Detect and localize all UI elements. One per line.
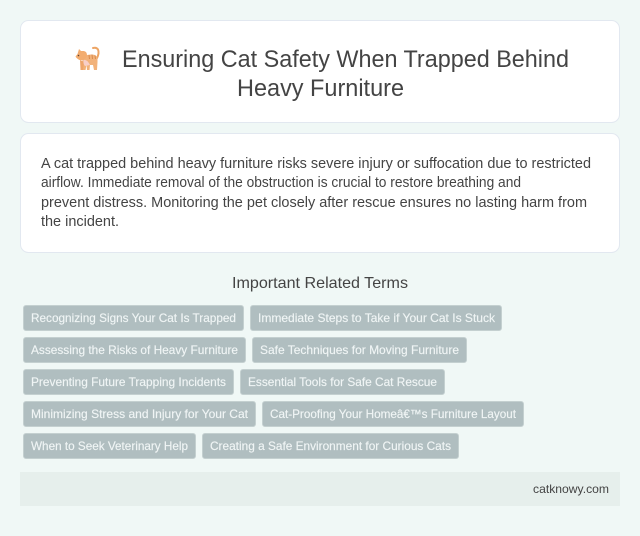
tag: Immediate Steps to Take if Your Cat Is Stuck: [258, 311, 496, 325]
tag: [24, 402, 256, 426]
tag: Safe Techniques for Moving Furniture: [260, 343, 459, 357]
intro paragraph: A cat trapped behind heavy furniture risks severe injury or suffocation due to restricted: [41, 156, 591, 172]
footer bar: catknowy.com: [533, 482, 609, 496]
tag: Creating a Safe Environment for Curious Cats: [210, 439, 451, 453]
intro paragraph: airflow. Immediate removal of the obstruction is crucial to restore breathing and: [41, 175, 521, 191]
tag: [24, 306, 244, 330]
title: Ensuring Cat Safety When Trapped Behind: [122, 46, 569, 73]
icon: cat: [76, 48, 99, 70]
intro paragraph: prevent distress. Monitoring the pet closely after rescue ensures no lasting harm from: [41, 195, 587, 211]
title: Heavy Furniture: [237, 75, 404, 102]
tag: Essential Tools for Safe Cat Rescue: [248, 375, 437, 389]
tag: Assessing the Risks of Heavy Furniture: [31, 343, 238, 357]
tag: Recognizing Signs Your Cat Is Trapped: [31, 311, 236, 325]
tag: [262, 402, 524, 426]
tag: [252, 338, 466, 362]
tag: [250, 306, 502, 330]
heading: important related terms: Important Related Terms: [232, 275, 408, 292]
tag: [202, 434, 458, 458]
panel: related term tags: [24, 306, 524, 458]
title: [122, 46, 569, 102]
panel: intro text card: [20, 134, 620, 252]
tag: When to Seek Veterinary Help: [31, 439, 188, 453]
tag: [24, 338, 246, 362]
tag: Cat-Proofing Your Homeâ€™s Furniture Layout: [270, 407, 517, 421]
intro paragraph: the incident.: [41, 214, 119, 230]
tag: [24, 370, 234, 394]
tag: [240, 370, 444, 394]
footer bar: [20, 472, 620, 506]
tag: Preventing Future Trapping Incidents: [31, 375, 226, 389]
panel: title card: [20, 20, 620, 122]
intro paragraph: [41, 156, 591, 230]
tag: Minimizing Stress and Injury for Your Cat: [31, 407, 249, 421]
tag: [24, 434, 196, 458]
